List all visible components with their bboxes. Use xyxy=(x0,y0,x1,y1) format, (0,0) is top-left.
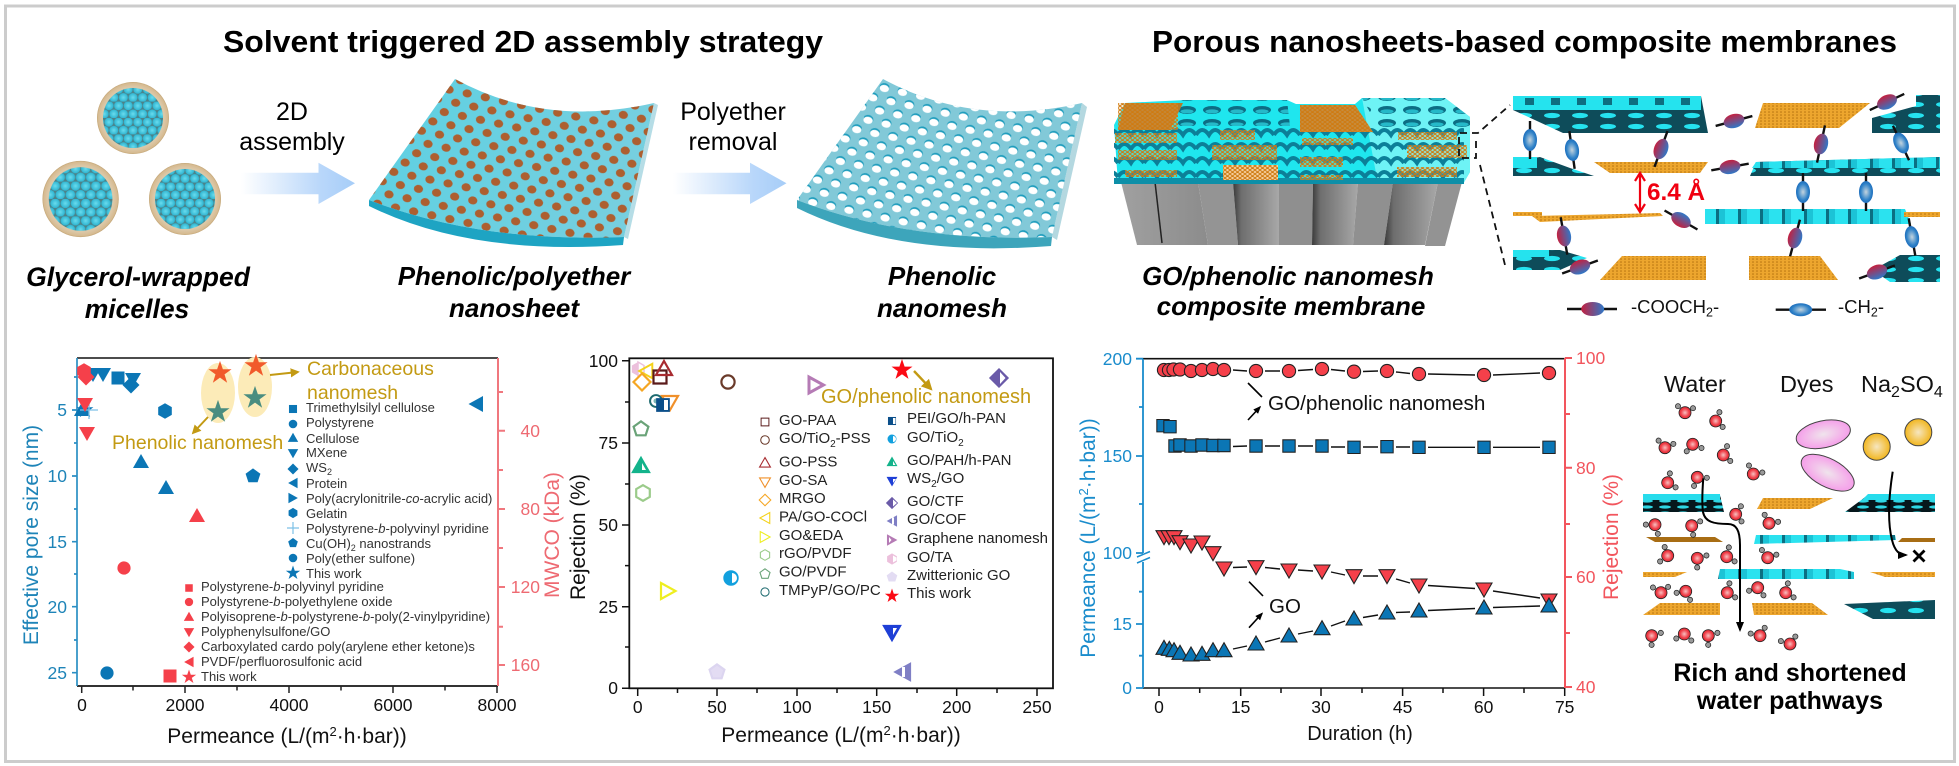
left axis numbers: 100 xyxy=(1103,543,1132,563)
legend: MWCO materials: Polystyrene-b-polyvinyl pyridine xyxy=(201,579,384,594)
legend: MWCO materials xyxy=(182,579,490,684)
left axis title: ·h·bar)) xyxy=(1077,418,1100,488)
left axis numbers: 5 xyxy=(57,400,67,420)
panel: water pathways schematic xyxy=(1641,371,1943,715)
illustration: phenolic/polyether nanosheet xyxy=(369,79,658,247)
arrow: water pathway xyxy=(1702,478,1740,630)
legend: right column: GO/TA xyxy=(907,549,953,566)
legend: left column: GO-PAA xyxy=(779,412,836,429)
data points xyxy=(632,359,1008,680)
caption: composite membrane: GO/phenolic nanomesh xyxy=(1142,261,1434,291)
nanomesh stack xyxy=(1114,98,1470,184)
legend: methylene linker xyxy=(1776,296,1884,320)
left axis numbers: 25 xyxy=(48,663,67,683)
left axis numbers: 200 xyxy=(1103,349,1132,369)
left axis numbers xyxy=(1103,349,1132,698)
caption: glycerol-wrapped micelles: Glycerol-wrapped xyxy=(26,262,251,292)
right axis numbers xyxy=(1576,348,1605,697)
zoom dashed callout lines xyxy=(1459,105,1510,265)
illustration: GO/phenolic nanomesh composite membrane xyxy=(1114,98,1470,246)
legend: MWCO materials: Polystyrene-b-polyethylene oxide xyxy=(201,594,393,609)
legend: MWCO materials: PVDF/perfluorosulfonic acid xyxy=(201,654,362,669)
legend: pore size materials: Polystyrene xyxy=(306,415,374,430)
label: 2D assembly: assembly xyxy=(239,128,345,156)
legend: methylene linker: 2 xyxy=(1871,306,1878,320)
right axis numbers xyxy=(511,421,540,675)
GO/phenolic nanomesh annotation xyxy=(1248,383,1485,420)
caption: phenolic nanomesh: nanomesh xyxy=(877,293,1007,323)
legend: pore size materials: MXene xyxy=(306,445,347,460)
right axis title: MWCO (kDa) xyxy=(541,472,564,598)
y axis numbers: 75 xyxy=(599,433,618,453)
right axis numbers: 40 xyxy=(1576,677,1596,697)
legend: left column: TMPyP/GO/PC xyxy=(779,582,881,599)
legend: right column: PEI/GO/h-PAN xyxy=(907,410,1006,427)
legend: right column: Graphene nanomesh xyxy=(907,530,1048,547)
x axis numbers: 6000 xyxy=(374,695,413,715)
illustration: phenolic nanomesh xyxy=(790,70,1090,250)
x axis numbers: 200 xyxy=(942,697,972,717)
legend: ester linker: -COOCH xyxy=(1631,296,1706,317)
caption: phenolic/polyether nanosheet: nanosheet xyxy=(449,293,580,323)
species labels: 2 xyxy=(1891,384,1900,401)
y axis numbers: 100 xyxy=(589,351,618,371)
legend: methylene linker: -CH xyxy=(1838,296,1871,317)
legend: pore size materials: Protein xyxy=(306,476,347,491)
legend: pore size materials: This work xyxy=(306,566,362,581)
plot frame and ticks xyxy=(622,358,1053,696)
x axis numbers: 0 xyxy=(77,695,87,715)
left axis title: Effective pore size (nm) xyxy=(20,425,43,645)
legend: pore size materials: Gelatin xyxy=(306,506,347,521)
chart: rejection vs permeance xyxy=(567,351,1053,747)
legend: right column: GO/COF xyxy=(907,511,966,528)
legend: ester linker: 2 xyxy=(1706,306,1713,320)
x axis title: 2 xyxy=(883,723,891,738)
left axis numbers: 20 xyxy=(48,597,67,617)
GO/phenolic nanomesh annotation: GO/phenolic nanomesh xyxy=(1268,392,1485,415)
left axis numbers: 150 xyxy=(1103,446,1132,466)
axes xyxy=(72,358,505,693)
left axis numbers: 10 xyxy=(48,466,67,486)
caption: water pathways: Rich and shortened xyxy=(1673,659,1907,687)
label: polyether removal: removal xyxy=(689,128,777,156)
x axis numbers: 30 xyxy=(1311,697,1331,717)
x axis numbers: 2000 xyxy=(166,695,205,715)
right axis numbers: 100 xyxy=(1576,348,1605,368)
x axis title: ·h·bar)) xyxy=(337,725,407,748)
legend: pore size materials xyxy=(286,400,492,581)
legend: right column: GO/CTF xyxy=(907,493,964,510)
legend: MWCO materials: Polyisoprene-b-polystyrene-b-poly(2-vinylpyridine) xyxy=(201,609,490,624)
x axis numbers: 0 xyxy=(633,697,643,717)
interlayer spacing arrow xyxy=(1635,173,1645,212)
carbonaceous nanomesh callout xyxy=(270,358,434,404)
legend: MWCO materials: Polyphenylsulfone/GO xyxy=(201,624,330,639)
legend: left column: GO&EDA xyxy=(779,527,843,544)
left axis numbers: 15 xyxy=(1113,614,1132,634)
legend: right column: 2 xyxy=(931,479,937,490)
legend: right column: Zwitterionic GO xyxy=(907,567,1010,584)
legend: methylene linker: - xyxy=(1878,296,1884,317)
linker bonds xyxy=(1523,88,1922,285)
x axis numbers: 50 xyxy=(707,697,727,717)
icon: dye molecules xyxy=(1794,415,1860,499)
y axis title: Rejection (%) xyxy=(567,474,590,600)
legend: right column: GO/TiO xyxy=(907,429,958,446)
legend: right column: This work xyxy=(907,585,972,602)
connecting lines xyxy=(1233,370,1540,649)
blue data points xyxy=(74,368,483,680)
legend: pore size materials: 2 xyxy=(327,467,332,477)
legend: right column xyxy=(885,410,1048,602)
legend: right column: /GO xyxy=(937,470,964,487)
rejection series: GO xyxy=(1156,531,1557,608)
x axis numbers: 45 xyxy=(1393,697,1412,717)
legend: left column: rGO/PVDF xyxy=(779,545,852,562)
x axis title: ·h·bar)) xyxy=(891,724,961,747)
x axis numbers: 60 xyxy=(1474,697,1494,717)
illustration: molecular structure of the composite xyxy=(1513,88,1940,285)
caption: composite membrane: composite membrane xyxy=(1157,291,1425,321)
legend: pore size materials: Poly(acrylonitrile-co-acrylic acid) xyxy=(306,491,492,506)
y axis numbers: 0 xyxy=(608,678,618,698)
legend: left column: GO/PVDF xyxy=(779,564,847,580)
legend: pore size materials: Cu(OH) xyxy=(306,536,351,551)
x axis title: 2 xyxy=(329,724,337,739)
this work stars xyxy=(206,354,268,422)
arrow: blocked ion pathway xyxy=(1889,472,1906,555)
GO/phenolic nanomesh callout xyxy=(821,371,1031,408)
phenolic nanomesh callout: Phenolic nanomesh xyxy=(112,432,283,454)
legend: left column: GO/TiO xyxy=(779,430,830,447)
x axis numbers xyxy=(633,697,1052,717)
x axis title: Permeance (L/(m xyxy=(167,725,329,748)
legend: pore size materials: Cellulose xyxy=(306,431,359,446)
layered nanosheets xyxy=(1643,494,1935,619)
x axis numbers: 250 xyxy=(1022,697,1052,717)
rejection series: nanomesh xyxy=(1157,362,1556,382)
left axis title: Permeance (L/(m xyxy=(1077,496,1100,658)
x axis numbers: 150 xyxy=(862,697,892,717)
species labels xyxy=(1664,371,1943,401)
icon: glycerol-wrapped micelles xyxy=(42,82,221,237)
legend: ester linker xyxy=(1567,296,1719,320)
x axis title: Duration (h) xyxy=(1307,723,1413,745)
legend: MWCO materials: Carboxylated cardo poly(arylene ether ketone)s xyxy=(201,639,475,654)
x axis title: Permeance (L/(m xyxy=(721,724,883,747)
y axis numbers: 25 xyxy=(599,597,618,617)
legend: right column: 2 xyxy=(958,438,964,449)
legend: pore size materials: nanostrands xyxy=(356,536,431,551)
caption: water pathways: water pathways xyxy=(1696,687,1883,715)
carbonaceous nanomesh callout: nanomesh xyxy=(307,382,398,404)
red data points xyxy=(77,363,205,682)
species labels: Na xyxy=(1861,371,1891,397)
right axis numbers: 60 xyxy=(1576,567,1596,587)
legend: left column: GO-SA xyxy=(779,472,827,489)
title: solvent triggered assembly: Solvent triggered 2D assembly strategy xyxy=(223,24,824,59)
legend: left column: 2 xyxy=(830,439,836,450)
right axis numbers: 160 xyxy=(511,655,540,675)
legend: right column: WS xyxy=(907,470,931,487)
GO annotation: GO xyxy=(1269,595,1301,618)
x axis numbers: 0 xyxy=(1154,697,1164,717)
legend: pore size materials: Trimethylsilyl cellulose xyxy=(306,400,435,415)
chart: pore size vs permeance xyxy=(20,354,564,748)
caption: phenolic/polyether nanosheet: Phenolic/polyether xyxy=(398,261,632,291)
x axis numbers: 75 xyxy=(1555,697,1574,717)
icon: water molecules xyxy=(1641,404,1802,653)
x axis numbers: 100 xyxy=(782,697,812,717)
GO/phenolic nanomesh callout: GO/phenolic nanomesh xyxy=(821,386,1031,408)
nanomesh slabs xyxy=(1513,95,1940,282)
left axis title: 2 xyxy=(1076,488,1091,496)
carbonaceous nanomesh callout: Carbonaceous xyxy=(307,358,434,380)
chart: stability over duration xyxy=(1076,348,1623,745)
arrow: polyether removal xyxy=(673,163,786,204)
left axis numbers: 0 xyxy=(1122,678,1132,698)
legend: pore size materials: 2 xyxy=(351,543,356,553)
graphene oxide patches xyxy=(1115,103,1467,180)
permeance series: GO xyxy=(1156,598,1557,661)
right axis title: Rejection (%) xyxy=(1600,474,1623,600)
right axis numbers: 80 xyxy=(521,499,540,519)
x axis numbers: 8000 xyxy=(478,695,517,715)
permeance series: nanomesh xyxy=(1157,420,1555,453)
title: composite membranes: Porous nanosheets-based composite membranes xyxy=(1152,24,1897,59)
species labels: Water xyxy=(1664,371,1726,397)
caption: phenolic nanomesh: Phenolic xyxy=(888,261,997,291)
legend: left column: PA/GO-COCl xyxy=(779,508,867,526)
label: polyether removal: Polyether xyxy=(680,98,786,126)
x axis numbers: 4000 xyxy=(270,695,309,715)
species labels: 4 xyxy=(1934,384,1943,401)
porous grey support xyxy=(1121,182,1462,246)
legend: MWCO materials: This work xyxy=(201,669,257,684)
x axis numbers xyxy=(1154,697,1574,717)
right axis numbers: 80 xyxy=(1576,458,1596,478)
legend: left column: GO-PSS xyxy=(779,454,837,470)
right axis numbers: 40 xyxy=(521,421,540,441)
arrow: 2D assembly xyxy=(241,163,355,204)
y axis numbers: 50 xyxy=(599,515,618,535)
legend: left column xyxy=(759,412,881,599)
label: 2D assembly: 2D xyxy=(276,98,308,126)
legend: left column: MRGO xyxy=(779,490,826,507)
species labels: SO xyxy=(1900,371,1934,397)
x axis numbers xyxy=(77,695,517,715)
species labels: Dyes xyxy=(1780,371,1834,397)
interlayer spacing value: 6.4 Å xyxy=(1647,178,1705,206)
legend: pore size materials: Polystyrene-b-polyvinyl pyridine xyxy=(306,521,489,536)
left axis numbers xyxy=(48,400,67,683)
highlight ellipses xyxy=(201,357,272,423)
axes xyxy=(1136,358,1572,696)
icon: blocked mark xyxy=(1914,550,1924,562)
legend: pore size materials: WS xyxy=(306,460,327,475)
icon: sodium sulfate ions xyxy=(1863,419,1932,460)
x axis numbers: 15 xyxy=(1231,697,1250,717)
graphene oxide sheets xyxy=(1513,103,1940,280)
y axis numbers xyxy=(589,351,618,698)
phenolic nanomesh callout xyxy=(112,417,283,454)
right axis numbers: 120 xyxy=(511,577,540,597)
left axis numbers: 15 xyxy=(48,532,67,552)
caption: glycerol-wrapped micelles: micelles xyxy=(85,294,189,324)
legend: right column: GO/PAH/h-PAN xyxy=(907,452,1011,469)
GO annotation xyxy=(1249,582,1301,628)
legend: left column: -PSS xyxy=(836,430,871,447)
legend: pore size materials: Poly(ether sulfone) xyxy=(306,551,415,566)
legend: ester linker: - xyxy=(1713,296,1719,317)
